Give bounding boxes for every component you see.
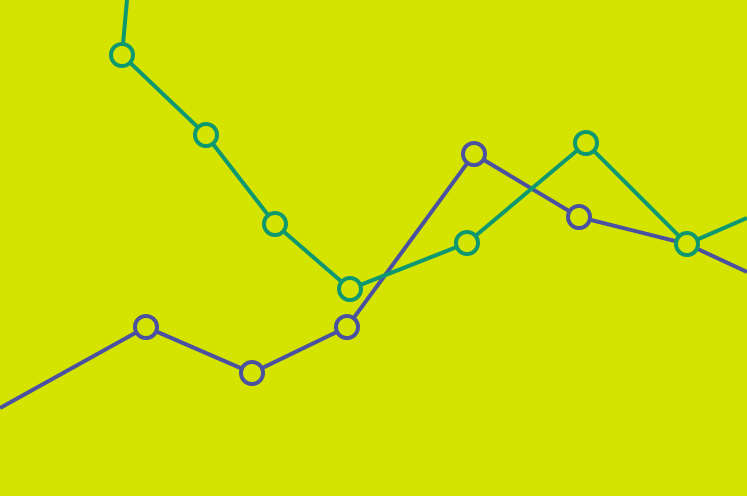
- series: green line: [111, 0, 747, 300]
- series: purple line: [0, 143, 747, 408]
